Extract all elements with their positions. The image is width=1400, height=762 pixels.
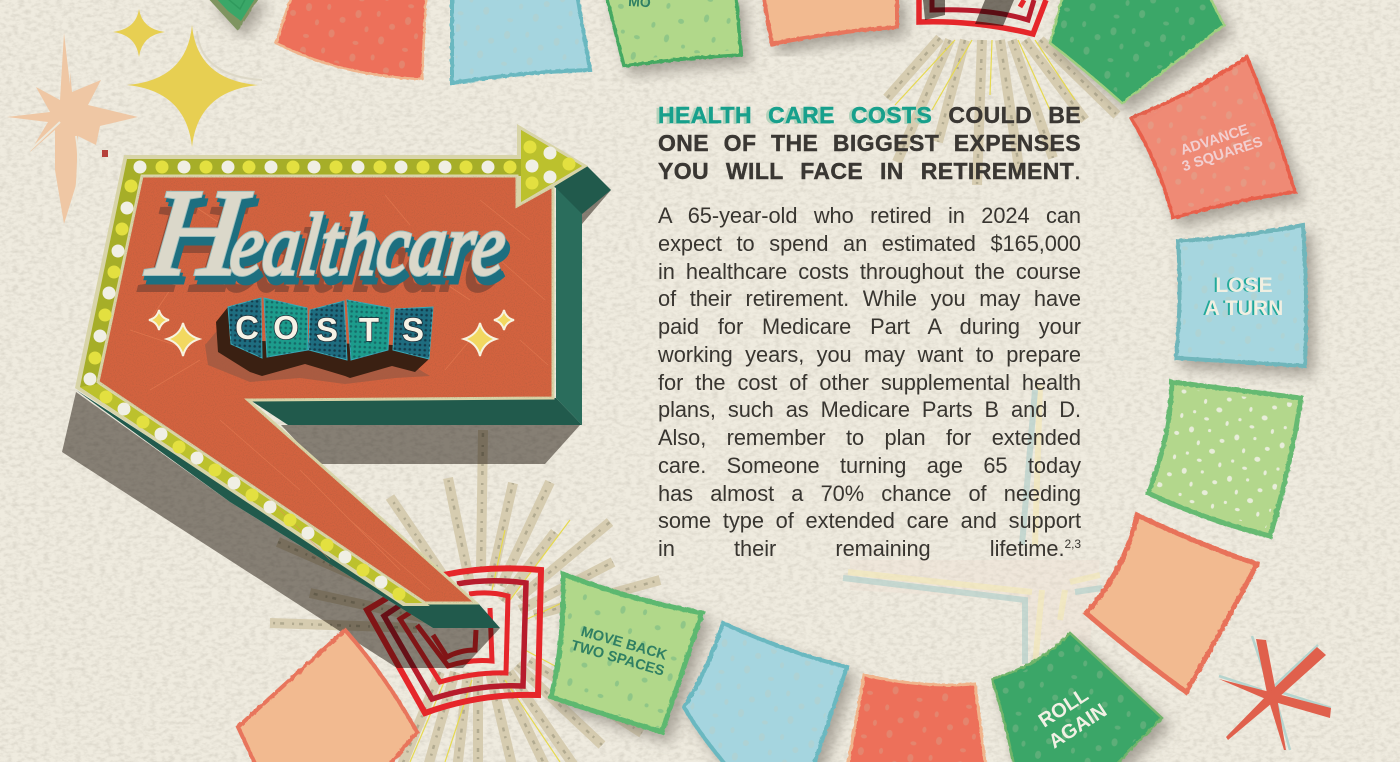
body text block: for the cost of other supplemental health: [658, 370, 1081, 394]
card: peach bottom-left: [238, 630, 417, 762]
body text block: Also, remember to plan for extended: [658, 425, 1081, 450]
body text block: A 65-year-old who retired in 2024 can: [658, 203, 1081, 228]
COSTS letter blocks: T: [359, 311, 379, 348]
asterisk decoration bottom right: [1219, 636, 1331, 750]
body text block: some type of extended care and support: [658, 508, 1081, 533]
card: green top right: [1050, 0, 1224, 103]
body text block: of their retirement. While you may have: [658, 286, 1081, 311]
COSTS letter blocks: S: [402, 311, 424, 348]
body text block: expect to spend an estimated $165,000: [658, 231, 1081, 256]
card: lose a turn: LOSE: [1215, 274, 1273, 297]
Healthcare script title: H: [145, 171, 260, 309]
sign: Healthcare Costs marquee arrow: [75, 124, 611, 628]
body text block: paid for Medicare Part A during your: [658, 314, 1081, 339]
card: lose a turn: [1176, 225, 1306, 366]
Healthcare script title: ealthcare: [230, 204, 514, 302]
card: move back top: [606, 0, 741, 66]
concentric red frame: bottom: [367, 568, 541, 713]
marquee light bulbs: [84, 140, 576, 600]
card: red top: [276, 0, 426, 79]
COSTS letter blocks: C: [235, 309, 259, 346]
card: light green dotted: [1148, 382, 1301, 536]
Healthcare script title: ealthcare: [227, 200, 512, 298]
Healthcare script title: ealthcare: [226, 196, 510, 294]
card: roll again: AGAIN: [1045, 700, 1111, 753]
Healthcare script title: [135, 163, 519, 317]
card: advance 3 squares: 3 SQUARES: [1180, 134, 1265, 175]
body text block: care. Someone turning age 65 today: [658, 453, 1081, 478]
card: lose a turn: LOSE: [1213, 274, 1271, 297]
heading: health care costs: HEALTH CARE COSTS COULD BE: [658, 102, 1081, 128]
card: advance 3 squares: [1131, 57, 1295, 218]
card: peach top: [763, 0, 897, 44]
heading: health care costs: [656, 102, 1081, 184]
card: blue top: [452, 0, 590, 83]
body text block: plans, such as Medicare Parts B and D.: [658, 397, 1081, 422]
card: blue bottom: [684, 623, 847, 762]
Healthcare script title: H: [135, 179, 250, 317]
card: peach right: [1086, 515, 1257, 692]
card: advance 3 squares: ADVANCE: [1179, 122, 1251, 159]
card: red bottom: [847, 675, 986, 762]
sign red face: [98, 176, 553, 603]
body text block: has almost a 70% chance of needing: [658, 480, 1081, 506]
COSTS letter blocks: [205, 298, 433, 384]
sparkles on sign: [149, 310, 514, 356]
card: lose a turn: A TURN: [1205, 297, 1283, 320]
card: move back two spaces: [551, 574, 702, 732]
COSTS letter blocks: S: [316, 311, 338, 348]
sunburst rays: bottom: [270, 430, 660, 762]
faded background building outline: [843, 385, 1102, 665]
body text block: working years, you may want to prepare: [658, 342, 1081, 367]
concentric red frame: top: [919, 0, 1046, 34]
heading: health care costs: ONE OF THE BIGGEST EXPENSES: [658, 130, 1081, 156]
Healthcare script title: ealthcare: [226, 196, 510, 294]
card: roll again: ROLL: [1035, 684, 1093, 732]
Healthcare script title: H: [141, 163, 256, 301]
body text block: in their remaining lifetime.2,3: [658, 536, 1081, 561]
card: lose a turn: A TURN: [1203, 297, 1281, 320]
sunburst rays: top: [887, 38, 1117, 185]
heading: health care costs: YOU WILL FACE IN RETIREMENT.: [658, 158, 1081, 184]
card: move back two spaces: TWO SPACES: [569, 638, 666, 680]
body text block: in healthcare costs throughout the course: [658, 258, 1081, 284]
icon: large yellow star: [127, 25, 262, 147]
Healthcare script title: H: [143, 167, 258, 305]
sign grey cast shadows: [62, 190, 611, 668]
Healthcare script title: ealthcare: [220, 212, 504, 310]
card: move back two spaces: MOVE BACK: [579, 624, 669, 664]
icon: small yellow star: [113, 9, 165, 57]
sign face scratches: [130, 190, 548, 590]
body text block: [658, 203, 1081, 561]
decorative red speck: [102, 150, 108, 157]
card: roll again: [992, 633, 1162, 762]
card: green top left: [204, 0, 262, 31]
icon: peach starburst: [7, 33, 138, 224]
Healthcare script title: H: [141, 163, 256, 301]
sign extruded sides: [76, 166, 611, 628]
COSTS letter blocks: O: [273, 309, 299, 346]
sign face grain: [98, 176, 553, 603]
sign marquee band: [75, 124, 588, 606]
